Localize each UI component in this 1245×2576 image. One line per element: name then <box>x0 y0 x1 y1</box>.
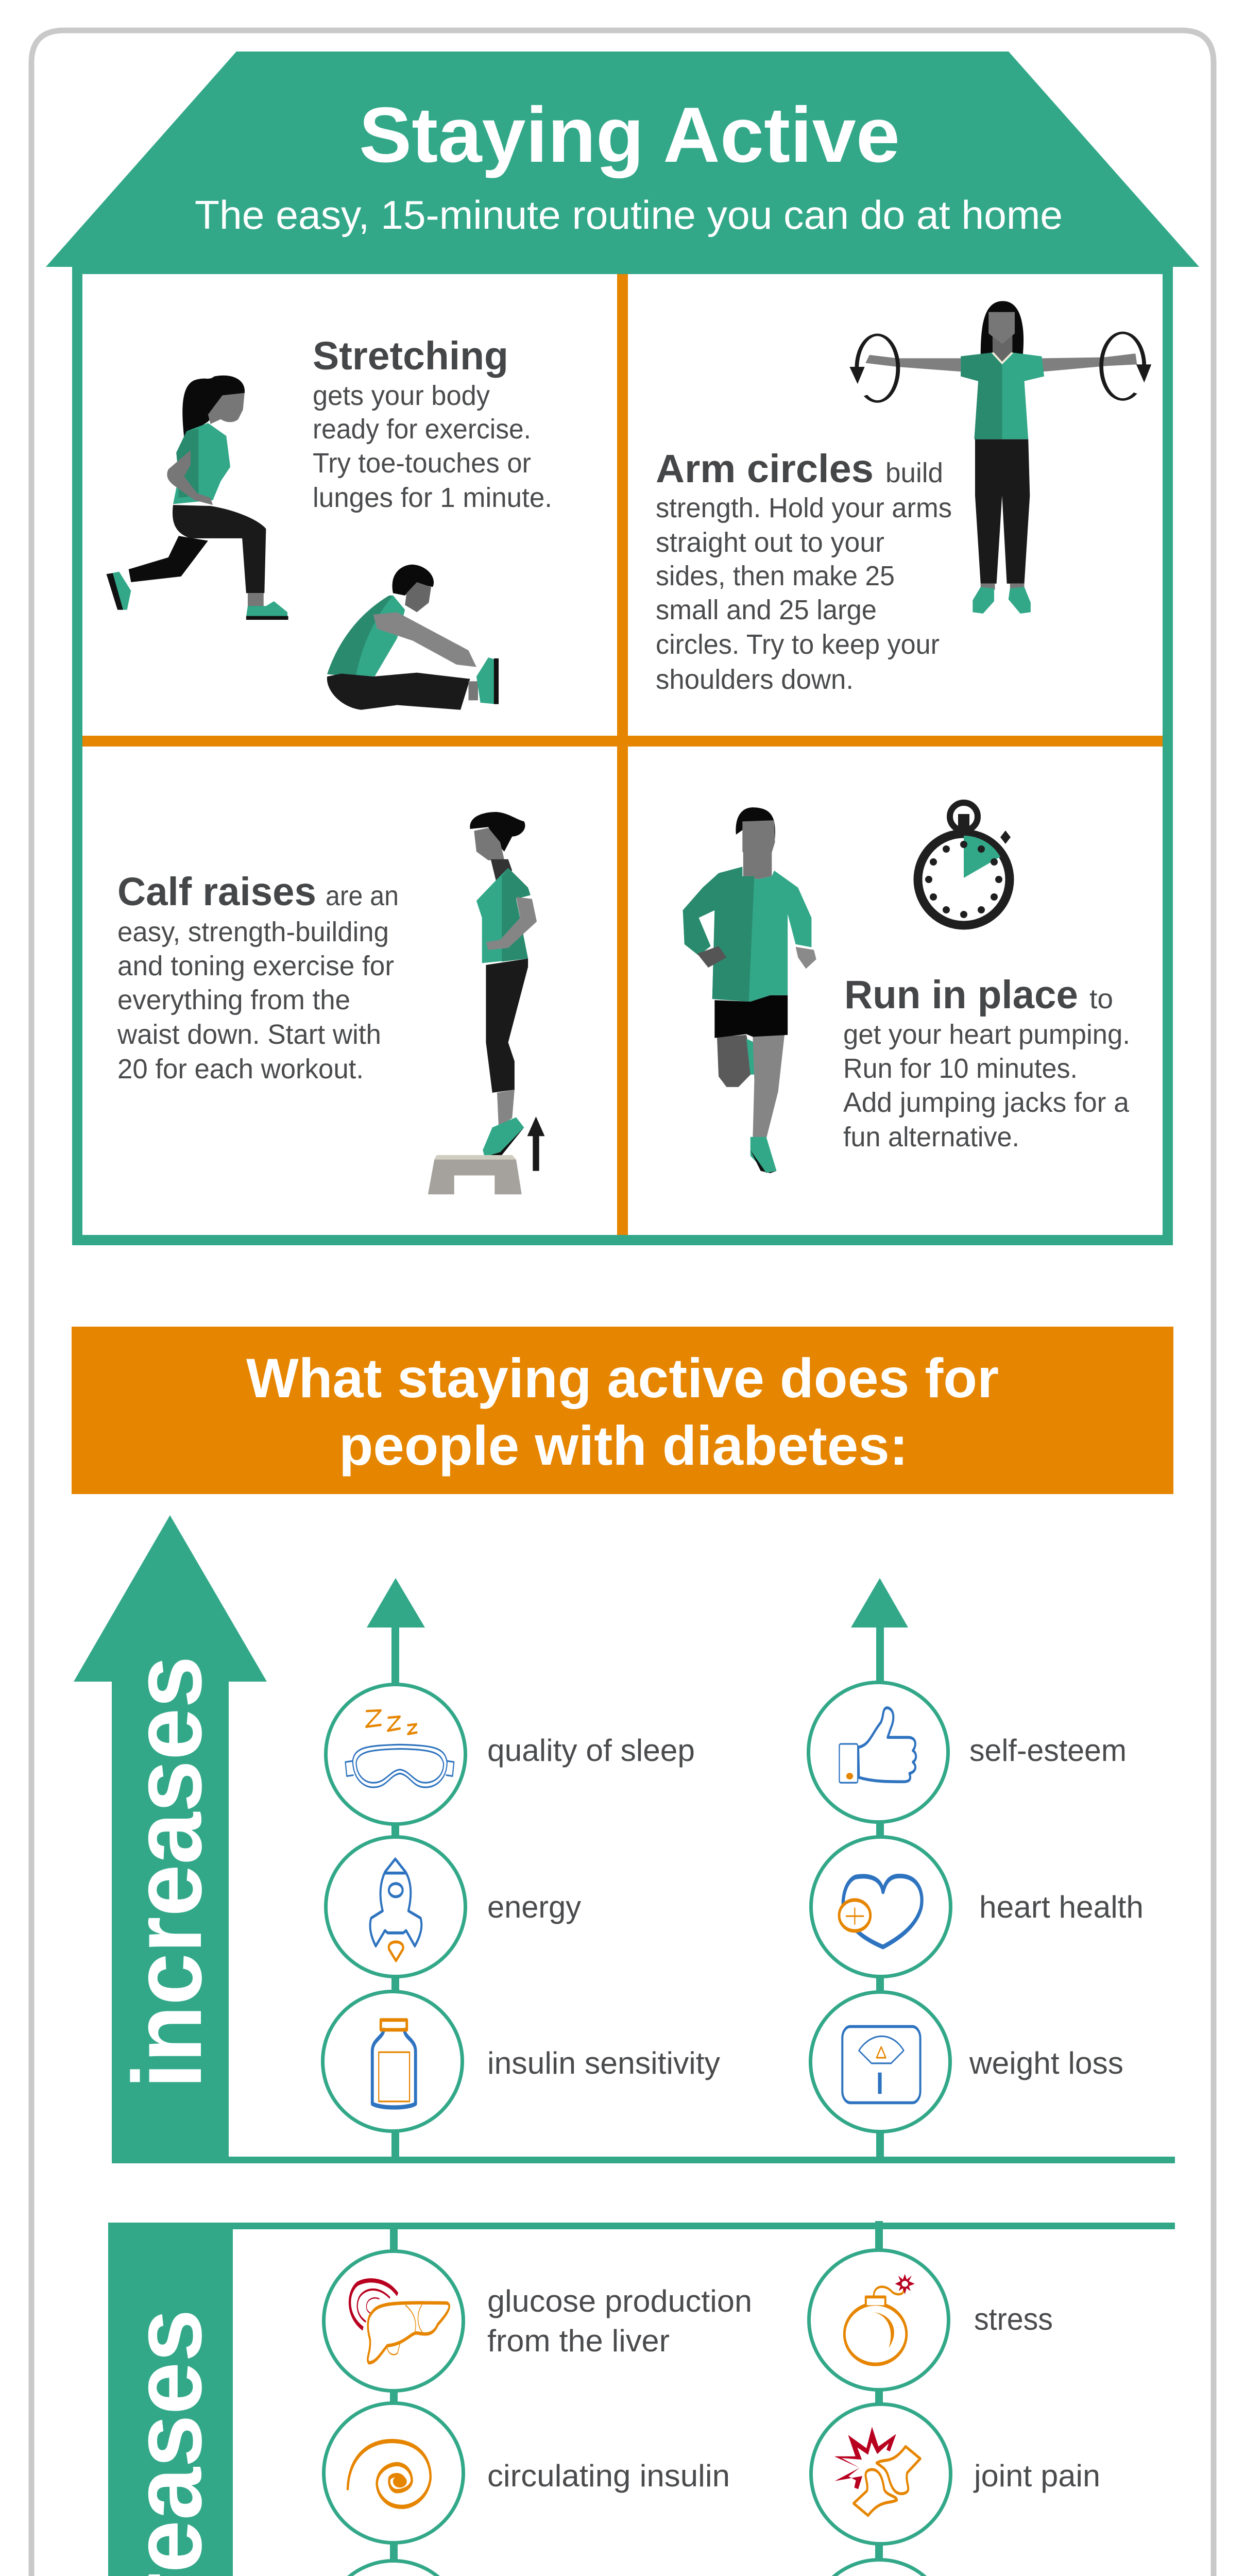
arrow: big increases arrow <box>74 1515 1175 2163</box>
panel: run in place <box>683 803 1130 1173</box>
banner: what staying active does: What staying active does for <box>246 1347 999 1409</box>
icon: spiral <box>348 2441 431 2507</box>
heading and body text: Calf raises <box>117 870 316 914</box>
arrow: rise up <box>527 1116 544 1171</box>
heading and body text <box>656 447 952 695</box>
item: circulating insulin <box>323 2403 730 2543</box>
arrow: left arm rotation <box>849 335 898 401</box>
subtitle: The easy, 15-minute routine you can do at home <box>195 192 1063 238</box>
figure: woman on step <box>428 812 544 1194</box>
heading and body text: get your heart pumping. <box>843 1019 1130 1050</box>
heading and body text: circles. Try to keep your <box>656 629 940 660</box>
item: self-esteem <box>809 1683 1127 1822</box>
heading and body text: and toning exercise for <box>117 951 394 981</box>
item: fatigue <box>810 2560 1068 2576</box>
item: stress <box>809 2250 1053 2389</box>
heading and body text: Run for 10 minutes. <box>843 1053 1078 1084</box>
label <box>487 2284 752 2358</box>
heading and body text: easy, strength-building <box>117 917 389 947</box>
heading and body text: build <box>885 457 943 488</box>
heading and body text: straight out to your <box>656 527 884 558</box>
heading and body text: strength. Hold your arms <box>656 493 952 523</box>
title: Staying Active <box>359 91 900 179</box>
label: self-esteem <box>969 1733 1127 1768</box>
figure: man touching toes <box>327 565 499 710</box>
body text: Try toe-touches or <box>313 448 531 479</box>
heading: Stretching <box>313 334 508 378</box>
item: glucose production <box>323 2251 752 2391</box>
arrow: right arm rotation <box>1101 333 1151 399</box>
arrow: big decreases arrow <box>67 2223 1175 2576</box>
icon: bomb <box>844 2274 915 2364</box>
label: weight loss <box>969 2046 1123 2080</box>
label: heart health <box>979 1890 1144 1924</box>
body text <box>313 380 552 513</box>
item: heart health <box>811 1837 1144 1976</box>
heading and body text: are an <box>326 880 399 911</box>
icon: heart with plus <box>839 1876 922 1947</box>
arrow: big increases arrow: increases <box>113 1656 222 2089</box>
heading and body text: shoulders down. <box>656 664 854 695</box>
figure: woman in lunge <box>107 376 288 620</box>
icon: thumbs up <box>839 1708 916 1783</box>
arrow: decreases column 2 <box>847 2221 911 2576</box>
item: weight loss <box>811 1992 1123 2132</box>
heading and body text: small and 25 large <box>656 595 877 625</box>
panel: house roof header <box>46 52 1199 274</box>
label: glucose production <box>487 2284 752 2318</box>
item: quality of sleep <box>326 1685 695 1824</box>
heading and body text <box>843 973 1130 1153</box>
body text: gets your body <box>313 380 490 411</box>
label: quality of sleep <box>487 1733 695 1768</box>
body text: ready for exercise. <box>313 414 531 445</box>
label: circulating insulin <box>487 2459 730 2493</box>
heading and body text: waist down. Start with <box>117 1019 381 1050</box>
label: joint pain <box>973 2459 1100 2493</box>
heading and body text: Run in place <box>844 973 1078 1017</box>
icon: joint pain <box>834 2427 920 2516</box>
heading and body text: fun alternative. <box>843 1122 1019 1153</box>
heading and body text: sides, then make 25 <box>656 561 895 591</box>
arrow: increases column 1 <box>367 1578 425 2159</box>
figure: running man <box>683 807 816 1173</box>
arrow: increases column 2 <box>851 1578 908 2159</box>
icon: sleep mask <box>346 1710 454 1787</box>
item: insulin sensitivity <box>322 1992 720 2131</box>
panel: calf raises <box>117 812 544 1194</box>
banner: what staying active does <box>72 1327 1173 1494</box>
icon: insulin bottle <box>372 2020 416 2108</box>
label: from the liver <box>487 2324 670 2358</box>
item: energy <box>326 1837 581 1976</box>
item: joint pain <box>811 2404 1100 2544</box>
heading and body text: Arm circles <box>656 447 874 491</box>
label: energy <box>487 1890 581 1924</box>
label: insulin sensitivity <box>487 2046 720 2080</box>
icon: scale <box>842 2026 920 2103</box>
panel: house walls and dividers <box>72 274 1173 1245</box>
icon: stopwatch <box>918 803 1011 925</box>
panel: stretching <box>107 334 552 710</box>
label: stress <box>974 2302 1053 2336</box>
heading and body text <box>117 870 399 1084</box>
heading and body text: Add jumping jacks for a <box>843 1087 1130 1118</box>
item: cholesterol <box>323 2561 637 2576</box>
icon: rocket <box>370 1859 421 1961</box>
figure: woman with arms out <box>849 301 1151 614</box>
heading and body text: to <box>1089 984 1113 1014</box>
heading and body text: everything from the <box>117 985 350 1015</box>
icon: liver <box>350 2280 449 2363</box>
arrow: decreases column 1 <box>361 2226 425 2576</box>
body text: lunges for 1 minute. <box>313 482 552 513</box>
panel: arm circles <box>656 301 1151 695</box>
banner: what staying active does: people with diabetes: <box>339 1414 908 1477</box>
heading and body text: 20 for each workout. <box>117 1054 364 1084</box>
